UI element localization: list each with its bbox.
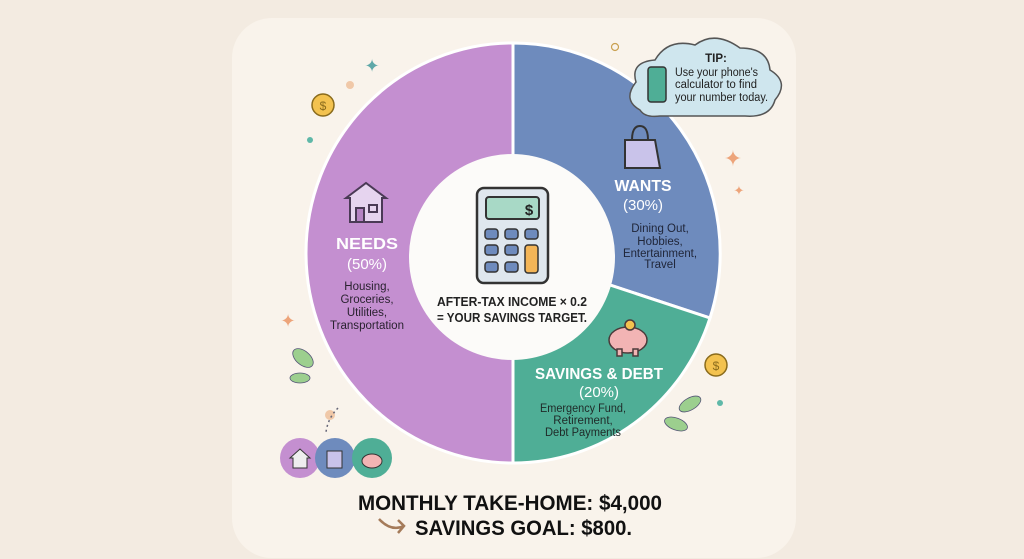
decorative icons: coins, stars, leaves: $ (320, 99, 327, 113)
decorative icons: coins, stars, leaves: ✦ (724, 146, 742, 171)
decorative icons: coins, stars, leaves: $ (713, 359, 720, 373)
label: wants: WANTS (614, 178, 672, 195)
bottom summary text: SAVINGS GOAL: $800. (415, 517, 632, 540)
decorative icons: coins, stars, leaves: ✦ (364, 56, 380, 76)
label: needs: NEEDS (336, 236, 398, 253)
label: savings & debt: Retirement, (553, 415, 613, 427)
label: savings & debt: Emergency Fund, (540, 403, 626, 415)
bottom summary text: MONTHLY TAKE-HOME: $4,000 (358, 492, 662, 515)
label: needs: Utilities, (347, 307, 387, 319)
decorative icons: coins, stars, leaves: ✦ (734, 183, 745, 198)
label: savings & debt: (20%) (579, 384, 619, 401)
icon: piggy bank (609, 320, 647, 356)
callout: tip cloud (630, 38, 781, 116)
callout: tip cloud: calculator to find (675, 79, 757, 91)
bottom summary text (358, 492, 662, 540)
donut chart (306, 43, 720, 463)
label: savings & debt: Debt Payments (545, 427, 621, 439)
decorative icons: coins, stars, leaves (280, 44, 745, 434)
segment: wants (513, 43, 720, 318)
center formula text: AFTER-TAX INCOME × 0.2 (437, 294, 587, 309)
mini category icons (280, 438, 392, 478)
label: wants: Entertainment, (623, 248, 697, 260)
icon: shopping bag (625, 126, 660, 168)
decorative icons: coins, stars, leaves: ✦ (280, 311, 296, 331)
label: needs: Transportation (330, 320, 404, 332)
callout: tip cloud: TIP: (705, 53, 727, 65)
icon: calculator: $ (525, 202, 534, 219)
label: savings & debt: SAVINGS & DEBT (535, 366, 663, 383)
callout: tip cloud: your number today. (675, 92, 768, 104)
label: wants: Dining Out, (631, 223, 689, 235)
label: wants: Hobbies, (637, 236, 683, 248)
label: savings & debt (535, 366, 663, 439)
label: wants: Travel (644, 259, 676, 271)
icon: house (346, 183, 386, 222)
icon: calculator (477, 188, 548, 283)
card background (232, 18, 796, 558)
callout: tip cloud: Use your phone's (675, 67, 758, 79)
center formula text (437, 294, 587, 325)
segment: savings (513, 253, 710, 463)
label: wants: (30%) (623, 197, 663, 214)
label: needs: (50%) (347, 256, 387, 273)
label: wants (614, 178, 697, 271)
label: needs: Groceries, (340, 294, 394, 306)
arrow (379, 519, 404, 533)
center formula text: = YOUR SAVINGS TARGET. (437, 310, 587, 325)
label: needs (330, 236, 404, 332)
label: needs: Housing, (344, 281, 390, 293)
segment: needs (306, 43, 513, 463)
